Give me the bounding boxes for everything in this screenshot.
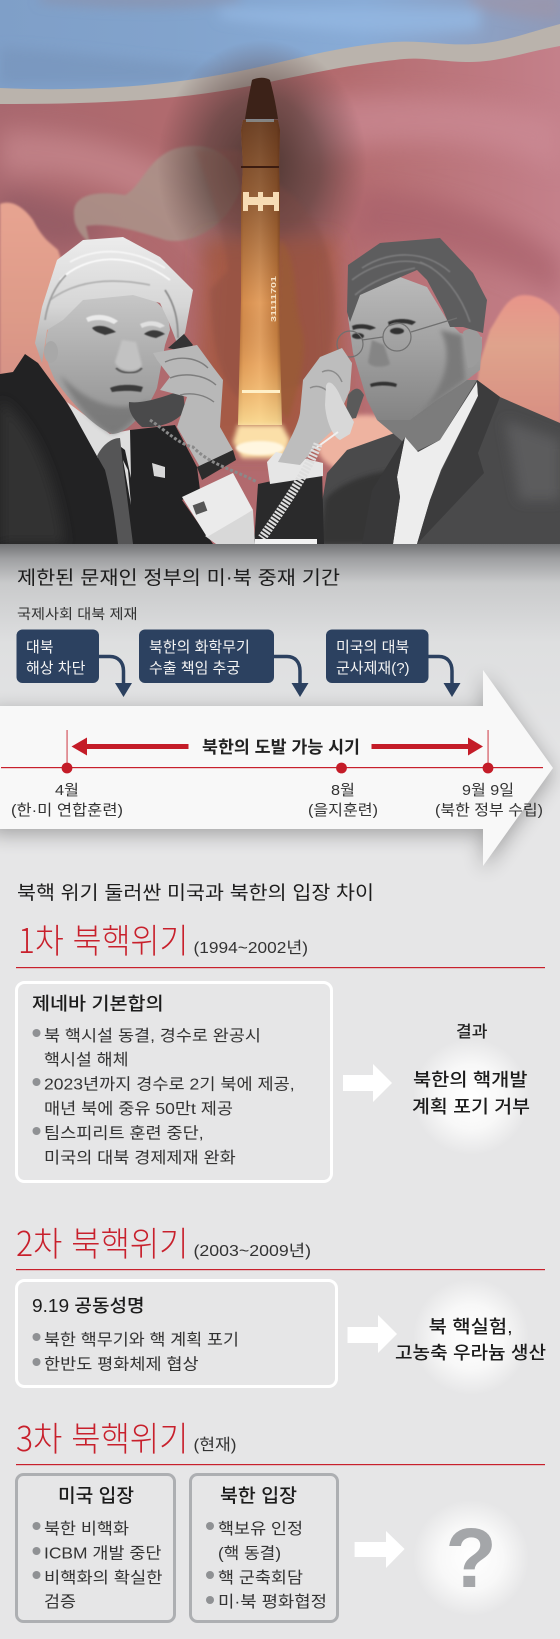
- timeline: [1, 730, 543, 819]
- statement bullets: [32, 1333, 40, 1366]
- april label: [11, 782, 123, 819]
- flag: white band: [0, 24, 560, 104]
- Moon cheek shading: [430, 329, 466, 404]
- result text: [412, 1070, 530, 1117]
- Trump nose: [115, 340, 142, 371]
- Moon handset: [325, 382, 354, 440]
- agreement title: 제네바 기본합의: [32, 994, 164, 1014]
- North Korea text: 미·북 평화협정: [218, 1593, 327, 1611]
- rocket nose: [245, 78, 278, 119]
- september label: 9월 9일: [462, 782, 514, 799]
- question mark: ?: [445, 1511, 497, 1605]
- Moon handset strap: [345, 389, 364, 420]
- emblem: star shape: [212, 153, 334, 396]
- Moon neck: [377, 380, 477, 452]
- Trump cheek shading: [60, 375, 150, 434]
- Moon suit: [315, 380, 560, 544]
- North Korea text: 핵 군축회담: [218, 1569, 303, 1587]
- Trump phone cord: [150, 420, 257, 482]
- flag: fabric folds: [0, 96, 560, 300]
- US position box: [16, 1474, 174, 1622]
- result label: 결과: [456, 1023, 488, 1041]
- first crisis title: 1차 북핵위기: [18, 914, 188, 963]
- rocket: [233, 78, 304, 458]
- box 2 label: 수출 책임 추궁: [149, 660, 240, 677]
- Trump suit highlight: [0, 400, 65, 544]
- second crisis title: 2차 북핵위기: [16, 1217, 188, 1266]
- august marker: [336, 763, 347, 773]
- rocket flame: [233, 425, 290, 458]
- august label: [308, 782, 378, 819]
- agreement text: 팀스피리트 훈련 중단,: [44, 1124, 204, 1142]
- box 2 arrow: [274, 656, 308, 697]
- Trump watch band: [197, 450, 236, 480]
- North Korea text: (핵 동결): [218, 1544, 281, 1562]
- Trump tie: [97, 438, 133, 544]
- Trump shirt collar: [67, 402, 131, 478]
- statement text: 북한 핵무기와 핵 계획 포기: [44, 1331, 239, 1349]
- rocket serial: 31111701: [269, 276, 278, 322]
- agreement text: 핵시설 해체: [44, 1051, 129, 1069]
- flag: blue stripe: [0, 0, 560, 90]
- phone cord: [262, 432, 338, 538]
- result text: 고농축 우라늄 생산: [395, 1343, 546, 1363]
- US text: 북한 비핵화: [44, 1520, 129, 1538]
- april label: (한·미 연합훈련): [11, 802, 123, 819]
- september marker: [483, 730, 493, 773]
- outcome glow: [413, 1500, 529, 1616]
- section: third crisis: [16, 1412, 545, 1622]
- emblem: flag circle: [73, 146, 226, 242]
- Trump cufflink: [193, 501, 207, 515]
- Moon shirt: [393, 382, 478, 544]
- arrow to result: [343, 1064, 392, 1102]
- agreement text: 북 핵시설 동결, 경수로 완공시: [44, 1027, 261, 1045]
- person: Moon: [254, 238, 560, 544]
- Moon hair: [347, 238, 487, 333]
- rocket rings: [243, 197, 279, 205]
- september label: [435, 782, 543, 819]
- rocket smoke: [279, 245, 304, 416]
- clouds right: [477, 294, 560, 423]
- big timeline arrow: [0, 670, 553, 866]
- US text: 검증: [44, 1593, 76, 1611]
- desk strip: [255, 539, 317, 544]
- clouds left: [0, 202, 85, 416]
- box 2 label: 북한의 화학무기: [149, 639, 250, 656]
- rocket shading: [238, 120, 282, 425]
- Moon finger shading: [310, 370, 342, 396]
- arrow: right span: [372, 738, 483, 756]
- warm brown glow behind rocket: [195, 240, 345, 450]
- section: first crisis: [16, 914, 545, 1182]
- result text: [395, 1317, 546, 1363]
- first crisis years: (1994~2002년): [194, 939, 308, 957]
- agreement bullets: [32, 1029, 40, 1135]
- Moon left lapel: [384, 437, 405, 544]
- agreement text: [44, 1027, 295, 1167]
- Moon face: [348, 277, 482, 420]
- Trump eyes and brows: [86, 315, 165, 392]
- box 1 label: 해상 차단: [26, 660, 86, 677]
- Trump ear: [44, 341, 58, 363]
- Trump hair strands: [45, 252, 178, 338]
- US text: [44, 1520, 163, 1611]
- timeline axis: [1, 767, 543, 768]
- agreement text: 미국의 대북 경제제재 완화: [44, 1149, 236, 1167]
- Moon ear: [463, 329, 482, 354]
- agreement text: 2023년까지 경수로 2기 북에 제공,: [44, 1076, 295, 1094]
- box 3 arrow: [428, 656, 460, 697]
- Moon hand: [278, 348, 352, 465]
- Trump hand: [153, 345, 233, 467]
- section: second crisis: [16, 1217, 546, 1395]
- statement text: 한반도 평화체제 협상: [44, 1356, 199, 1374]
- result glow: [413, 1039, 529, 1155]
- Moon eyes and brows: [352, 319, 416, 387]
- Moon glasses: [337, 318, 457, 357]
- result text: 북한의 핵개발: [413, 1070, 528, 1090]
- statement text: [44, 1331, 239, 1374]
- label: international sanctions: 국제사회 대북 제재: [17, 606, 138, 622]
- sanction box 2: [139, 630, 308, 697]
- arrow to outcome: [355, 1531, 405, 1568]
- North Korea position box: [190, 1474, 338, 1622]
- Moon nose: [368, 340, 390, 367]
- dark haze around rocket: [165, 45, 360, 254]
- box 3 label: 군사제재(?): [336, 660, 410, 677]
- august label: 8월: [331, 782, 355, 799]
- Trump suit: [0, 354, 213, 544]
- US text: ICBM 개발 중단: [44, 1544, 162, 1562]
- result text: 북 핵실험,: [429, 1317, 513, 1337]
- september label: (북한 정부 수립): [435, 802, 543, 819]
- Trump phone earpiece: [168, 334, 193, 352]
- heading: position differences: 북핵 위기 둘러싼 미국과 북한의 입장 차이: [17, 882, 374, 904]
- third crisis title: 3차 북핵위기: [16, 1412, 188, 1461]
- Trump hair: [35, 237, 193, 363]
- Trump handset: [129, 390, 185, 427]
- result text: 계획 포기 거부: [412, 1097, 530, 1117]
- rocket body: [238, 120, 282, 425]
- april label: 4월: [55, 782, 79, 799]
- North Korea position title: 북한 입장: [220, 1485, 297, 1507]
- sanction box 3: [326, 630, 460, 697]
- Moon right lapel: [417, 380, 500, 544]
- agreement text: 매년 북에 중유 50만t 제공: [44, 1100, 233, 1118]
- Trump face: [46, 292, 170, 434]
- span label: 북한의 도발 가능 시기: [202, 738, 360, 757]
- Trump shirt below cuff: [205, 510, 255, 544]
- Moon cuff: [267, 452, 323, 484]
- second crisis years: (2003~2009년): [194, 1242, 311, 1260]
- North Korea bullets: [206, 1522, 214, 1604]
- third crisis period: (현재): [194, 1436, 236, 1454]
- US bullets: [32, 1522, 40, 1579]
- result glow: [413, 1279, 529, 1395]
- Moon suit shading: [323, 471, 384, 544]
- big timeline arrow shadow: [0, 675, 553, 871]
- heading: mediation period: 제한된 문재인 정부의 미·북 중재 기간: [17, 567, 340, 589]
- hero photo illustration: [0, 0, 560, 544]
- statement box: [16, 1280, 336, 1386]
- august label: (을지훈련): [308, 802, 378, 819]
- arrow to result: [348, 1315, 397, 1353]
- US position title: 미국 입장: [58, 1485, 134, 1507]
- agreement box: [16, 982, 332, 1182]
- Moon suit highlight: [505, 420, 560, 500]
- clouds bottom centre: [314, 412, 393, 469]
- Trump flag pin: [152, 463, 165, 478]
- person: Trump: [0, 237, 257, 544]
- flag: red field: [0, 0, 560, 544]
- North Korea text: 핵보유 인정: [218, 1520, 303, 1538]
- Trump finger lines: [165, 358, 216, 402]
- box 3 label: 미국의 대북: [336, 639, 409, 656]
- Moon hair strands: [352, 255, 470, 322]
- box 1 label: 대북: [26, 639, 54, 656]
- US text: 비핵화의 확실한: [44, 1569, 163, 1587]
- Moon sleeve: [254, 470, 324, 544]
- sanction box 1: [16, 630, 132, 697]
- North Korea text: [218, 1520, 327, 1611]
- box 1 arrow: [99, 656, 132, 697]
- flag: blue highlights: [0, 0, 560, 84]
- arrow: left span: [72, 738, 188, 756]
- Trump cuff: [182, 473, 253, 537]
- april marker: [62, 730, 72, 773]
- lower background shading: [0, 543, 560, 793]
- statement title: 9.19 공동성명: [32, 1296, 145, 1316]
